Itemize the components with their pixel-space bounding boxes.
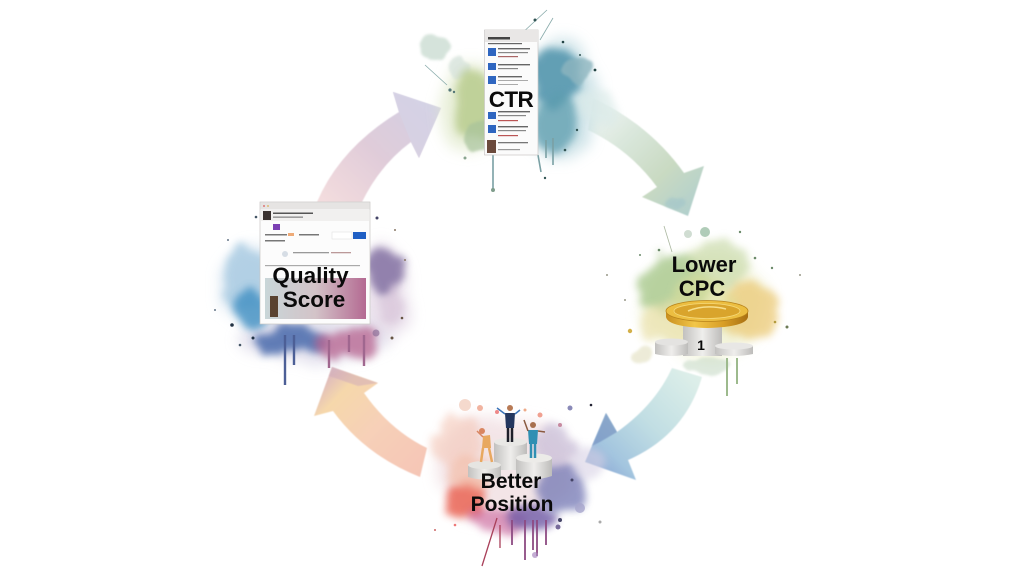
icon: podium: 1 (697, 337, 705, 353)
label: Better Position: Better (481, 470, 541, 493)
screenshot: search results window (484, 30, 538, 155)
label: Lower CPC (672, 252, 737, 301)
arrow: CTR to lower CPC (588, 98, 704, 216)
arrow: quality score to CTR (317, 92, 441, 202)
arrow: better position to quality score (314, 367, 427, 477)
label: Better Position (471, 470, 553, 516)
label: Better Position: Position (471, 493, 553, 516)
paint splash: green and teal (419, 10, 616, 192)
arrow: lower CPC to better position (585, 368, 702, 480)
icon: podium (655, 326, 753, 356)
icon: podium (468, 438, 552, 480)
icon: person, right (524, 420, 545, 458)
icon: person, left (477, 428, 492, 462)
icon: person, center (497, 405, 520, 442)
label: CTR: CTR (489, 87, 534, 112)
label: Quality Score: Score (283, 287, 345, 312)
node: lower CPC (606, 226, 801, 396)
node: quality score (214, 202, 409, 385)
label: Quality Score (272, 263, 349, 312)
paint splash: blue and purple (214, 216, 409, 385)
node: CTR (419, 10, 616, 192)
label: Lower CPC: Lower (672, 252, 737, 277)
paint splash: red and purple (431, 399, 606, 566)
label: Lower CPC: CPC (679, 276, 725, 301)
paint splash: green and gold (606, 226, 801, 396)
icon: gold coin (666, 300, 748, 328)
label: Quality Score: Quality (272, 263, 349, 288)
node: better position (431, 399, 606, 566)
screenshot: browser window (260, 202, 370, 324)
